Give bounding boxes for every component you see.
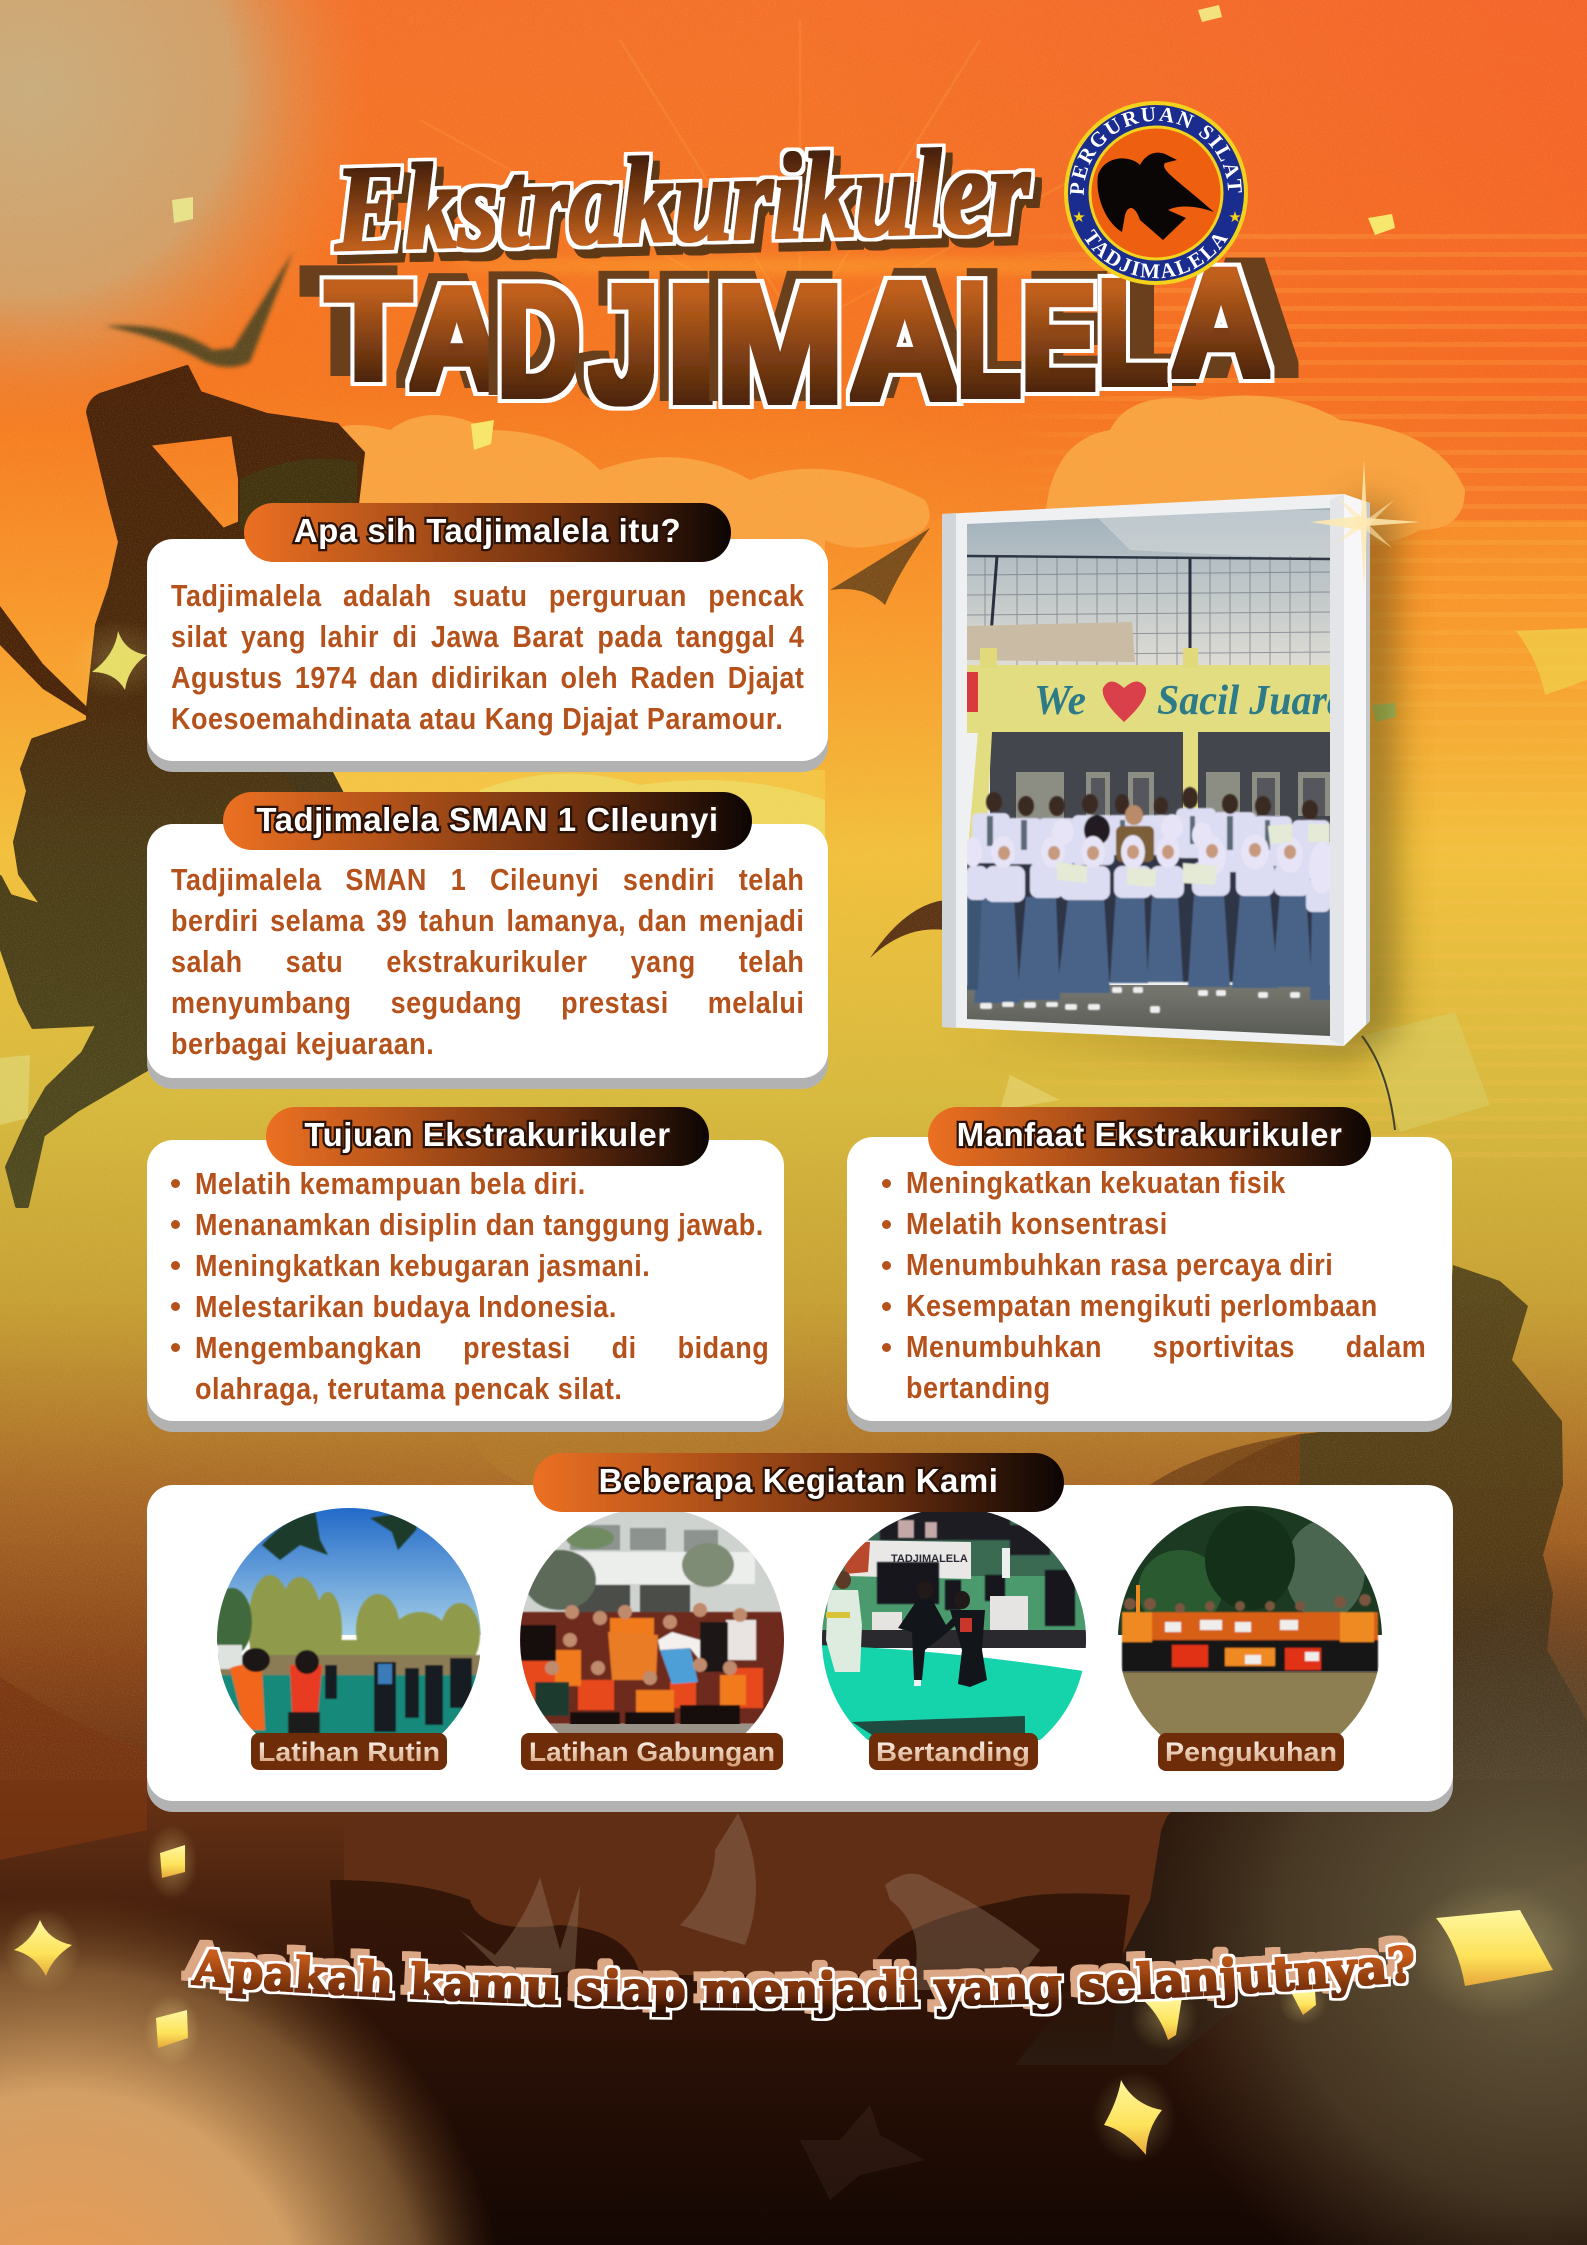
tree line <box>248 1575 480 1675</box>
flying bird lower <box>870 900 945 958</box>
sparkle left <box>172 197 193 223</box>
title: TADJIMALELA <box>326 238 1270 437</box>
label: Latihan Gabungan: Latihan Gabungan <box>529 1737 775 1767</box>
body text: menyumbang segudang prestasi melalui <box>171 985 804 1020</box>
stands crowd <box>880 1508 1050 1555</box>
yellow wall <box>967 665 1330 733</box>
title: TADJIMALELA: A <box>1172 238 1270 408</box>
sun rays <box>420 20 1180 330</box>
sparkle right title <box>1368 214 1395 235</box>
title: TADJIMALELA: A <box>850 248 960 433</box>
photo: Latihan Rutin <box>212 1505 485 1735</box>
photo <box>967 508 1330 1036</box>
sparkle below title <box>471 420 494 450</box>
banner blue <box>660 1648 698 1684</box>
sky <box>967 506 1330 676</box>
back row shirts <box>972 808 1330 872</box>
heading: Beberapa Kegiatan Kami: Beberapa Kegiatan Kami <box>599 1462 998 1499</box>
title: TADJIMALELA: A <box>410 259 504 420</box>
banner <box>845 1540 971 1579</box>
star left: ★ <box>1072 209 1086 226</box>
mat <box>215 1675 485 1735</box>
bullet list <box>882 1165 1426 1405</box>
flying bird <box>105 252 293 367</box>
body text: Koesoemahdinata atau Kang Djajat Paramour. <box>171 701 783 736</box>
logo: Perguruan Silat Tadjimalela <box>1064 101 1248 285</box>
banner orange <box>608 1632 658 1680</box>
sparkle right curl <box>1516 628 1587 695</box>
sparkle pale centre <box>1000 1075 1060 1110</box>
horizontal stripes <box>1078 234 1587 1157</box>
flare behind title <box>450 258 1210 274</box>
students <box>964 787 1335 1013</box>
bottom block <box>344 1813 1164 2000</box>
teacher <box>1125 805 1143 825</box>
heading: Tujuan Ekstrakurikuler <box>266 1107 709 1166</box>
heading: Manfaat Ekstrakurikuler <box>928 1107 1371 1166</box>
panel: Apa sih Tadjimalela itu <box>147 539 828 761</box>
body text <box>171 578 804 736</box>
label: Pengukuhan <box>1158 1733 1344 1771</box>
photo: Latihan Gabungan <box>518 1505 788 1736</box>
dark hills <box>330 1880 1130 2060</box>
book cover <box>942 494 1344 1046</box>
book side <box>1344 494 1370 1046</box>
blouses <box>967 860 1330 912</box>
heading: Manfaat Ekstrakurikuler: Manfaat Ekstrakurikuler <box>957 1116 1342 1153</box>
panel: Tadjimalela SMAN 1 Cileunyi <box>147 824 828 1078</box>
sparkle diamond left <box>68 619 168 699</box>
dark windows wall <box>990 732 1330 842</box>
right red-orange tint <box>800 0 1587 520</box>
crowd <box>518 1612 788 1724</box>
panel: Manfaat Ekstrakurikuler <box>847 1137 1452 1421</box>
title: TADJIMALELA: I <box>662 252 723 437</box>
ground <box>967 985 1330 1040</box>
sparkle star on book corner <box>1310 460 1420 590</box>
logo: Perguruan Silat Tadjimalela: TADJIMALELA <box>1084 228 1228 278</box>
beige corner glow <box>0 0 400 440</box>
body text: salah satu ekstrakurikuler yang telah <box>171 944 804 979</box>
fence <box>967 556 1330 665</box>
bottom left glow <box>0 1850 520 2245</box>
bullet list <box>171 1166 769 1406</box>
icon: eagle <box>1097 153 1214 240</box>
title: TADJIMALELA: E <box>1022 255 1096 420</box>
lower mat strip <box>852 1716 1025 1740</box>
bottom right haze <box>1140 1540 1587 2245</box>
bullet list: Melestarikan budaya Indonesia. <box>195 1289 617 1324</box>
bullet list: Melatih konsentrasi <box>906 1206 1168 1241</box>
lower cloud tints <box>0 1677 147 1860</box>
bullet list: Melatih kemampuan bela diri. <box>195 1166 586 1201</box>
photo: Pengukuhan <box>1115 1505 1385 1740</box>
heading: Tadjimalela SMAN 1 CIleunyi: Tadjimalela SMAN 1 CIleunyi <box>256 801 719 838</box>
bullet list: Mengembangkan prestasi di bidang <box>195 1330 769 1365</box>
title: Ekstrakurikuler: Ekstrakurikuler <box>332 123 1033 277</box>
sparkle glow 4 <box>1130 1983 1198 2051</box>
sparkle glow 2 <box>4 1908 80 1992</box>
heading: Apa sih Tadjimalela itu <box>244 503 731 562</box>
sparkle glow 6 <box>1092 2071 1176 2163</box>
silhouette: left dancer <box>0 367 363 1206</box>
sign text: We <box>1034 678 1086 724</box>
hijabs <box>964 814 1335 894</box>
silhouette: right figure <box>1015 1265 1587 2065</box>
panel: Beberapa Kegiatan Kami <box>147 1485 1453 1801</box>
star right: ★ <box>1228 209 1242 226</box>
grain <box>0 0 1587 1780</box>
panel: Tujuan Ekstrakurikuler <box>147 1140 784 1421</box>
label: Latihan Rutin: Latihan Rutin <box>258 1737 440 1767</box>
clouds lower yellow <box>190 770 825 880</box>
sparkle green <box>1372 703 1396 722</box>
shoes <box>980 987 1300 1013</box>
title: TADJIMALELA: J <box>590 251 659 436</box>
title: TADJIMALELA: D <box>498 253 580 428</box>
body text <box>171 862 804 1061</box>
green wall <box>820 1576 1090 1630</box>
sparkle glow 5 <box>1279 1981 1327 2025</box>
title: TADJIMALELA: L <box>1098 250 1167 414</box>
title: TADJIMALELA: M <box>716 250 844 436</box>
sparkle top <box>1198 5 1222 22</box>
title: TADJIMALELA: L <box>958 249 1020 430</box>
photo: Bertanding: TADJIMALELA <box>891 1553 968 1565</box>
faces <box>998 843 1296 860</box>
label: Bertanding: Bertanding <box>876 1737 1030 1767</box>
sparkle glow 1 <box>146 1824 198 1900</box>
heading: Tujuan Ekstrakurikuler: Tujuan Ekstrakurikuler <box>304 1116 671 1153</box>
bullet list: Menumbuhkan sportivitas dalam <box>906 1329 1426 1364</box>
logo: Perguruan Silat Tadjimalela: PERGURUAN SILAT <box>1070 107 1242 196</box>
orange figures <box>230 1664 265 1730</box>
mat <box>820 1645 1090 1740</box>
label: Pengukuhan: Pengukuhan <box>1165 1737 1337 1767</box>
body text: Tadjimalela adalah suatu perguruan pencak <box>171 578 804 613</box>
bullet list: Meningkatkan kekuatan fisik <box>906 1165 1286 1200</box>
label: Bertanding <box>869 1733 1038 1770</box>
tree branches <box>262 1510 328 1560</box>
certificates <box>1057 824 1330 887</box>
officials <box>877 1562 1075 1626</box>
body text: Agustus 1974 dan didirikan oleh Raden Djajat <box>171 660 804 695</box>
clouds upper <box>290 396 1465 560</box>
dark figures <box>325 1658 472 1732</box>
black fighters <box>898 1596 962 1680</box>
sparkle glow 3 <box>144 1994 200 2066</box>
photo: Bertanding <box>820 1505 1090 1740</box>
skirts <box>974 893 1330 1003</box>
bullet list: bertanding <box>906 1370 1051 1405</box>
body text: berbagai kejuaraan. <box>171 1026 434 1061</box>
bullet list: Meningkatkan kebugaran jasmani. <box>195 1248 650 1283</box>
dark floor <box>820 1630 1090 1648</box>
sparkle left pale <box>0 1055 30 1125</box>
white fighter <box>826 1590 862 1672</box>
flying bird mid <box>830 528 930 605</box>
sparkle large pale <box>1365 1012 1490 1132</box>
title: TADJIMALELA: T <box>326 255 411 408</box>
back row ties <box>987 816 1270 850</box>
body text: silat yang lahir di Jawa Barat pada tanggal 4 <box>171 619 804 654</box>
bullet list: Menanamkan disiplin dan tanggung jawab. <box>195 1207 764 1242</box>
group <box>1122 1594 1378 1672</box>
closing question: Apakah kamu siap menjadi yang selanjutnya? <box>181 1936 1416 2021</box>
heading: Tadjimalela SMAN 1 CIleunyi <box>223 792 752 850</box>
bullet list: Kesempatan mengikuti perlombaan <box>906 1288 1378 1323</box>
back row heads <box>986 787 1318 820</box>
book shadow <box>950 500 1395 1060</box>
dark behind <box>967 850 1330 982</box>
rooftop <box>967 622 1135 662</box>
heading: Apa sih Tadjimalela itu: Apa sih Tadjimalela itu? <box>294 512 681 549</box>
ghost birds <box>460 1813 1040 2200</box>
sparkle glow big <box>1405 1882 1585 2018</box>
photo book: school group <box>942 494 1395 1060</box>
bullet list: Menumbuhkan rasa percaya diri <box>906 1247 1333 1282</box>
body text: Tadjimalela SMAN 1 Cileunyi sendiri telah <box>171 862 804 897</box>
heading: Beberapa Kegiatan Kami <box>533 1453 1064 1512</box>
bullet list: olahraga, terutama pencak silat. <box>195 1371 622 1406</box>
body text: berdiri selama 39 tahun lamanya, dan menjadi <box>171 903 804 938</box>
